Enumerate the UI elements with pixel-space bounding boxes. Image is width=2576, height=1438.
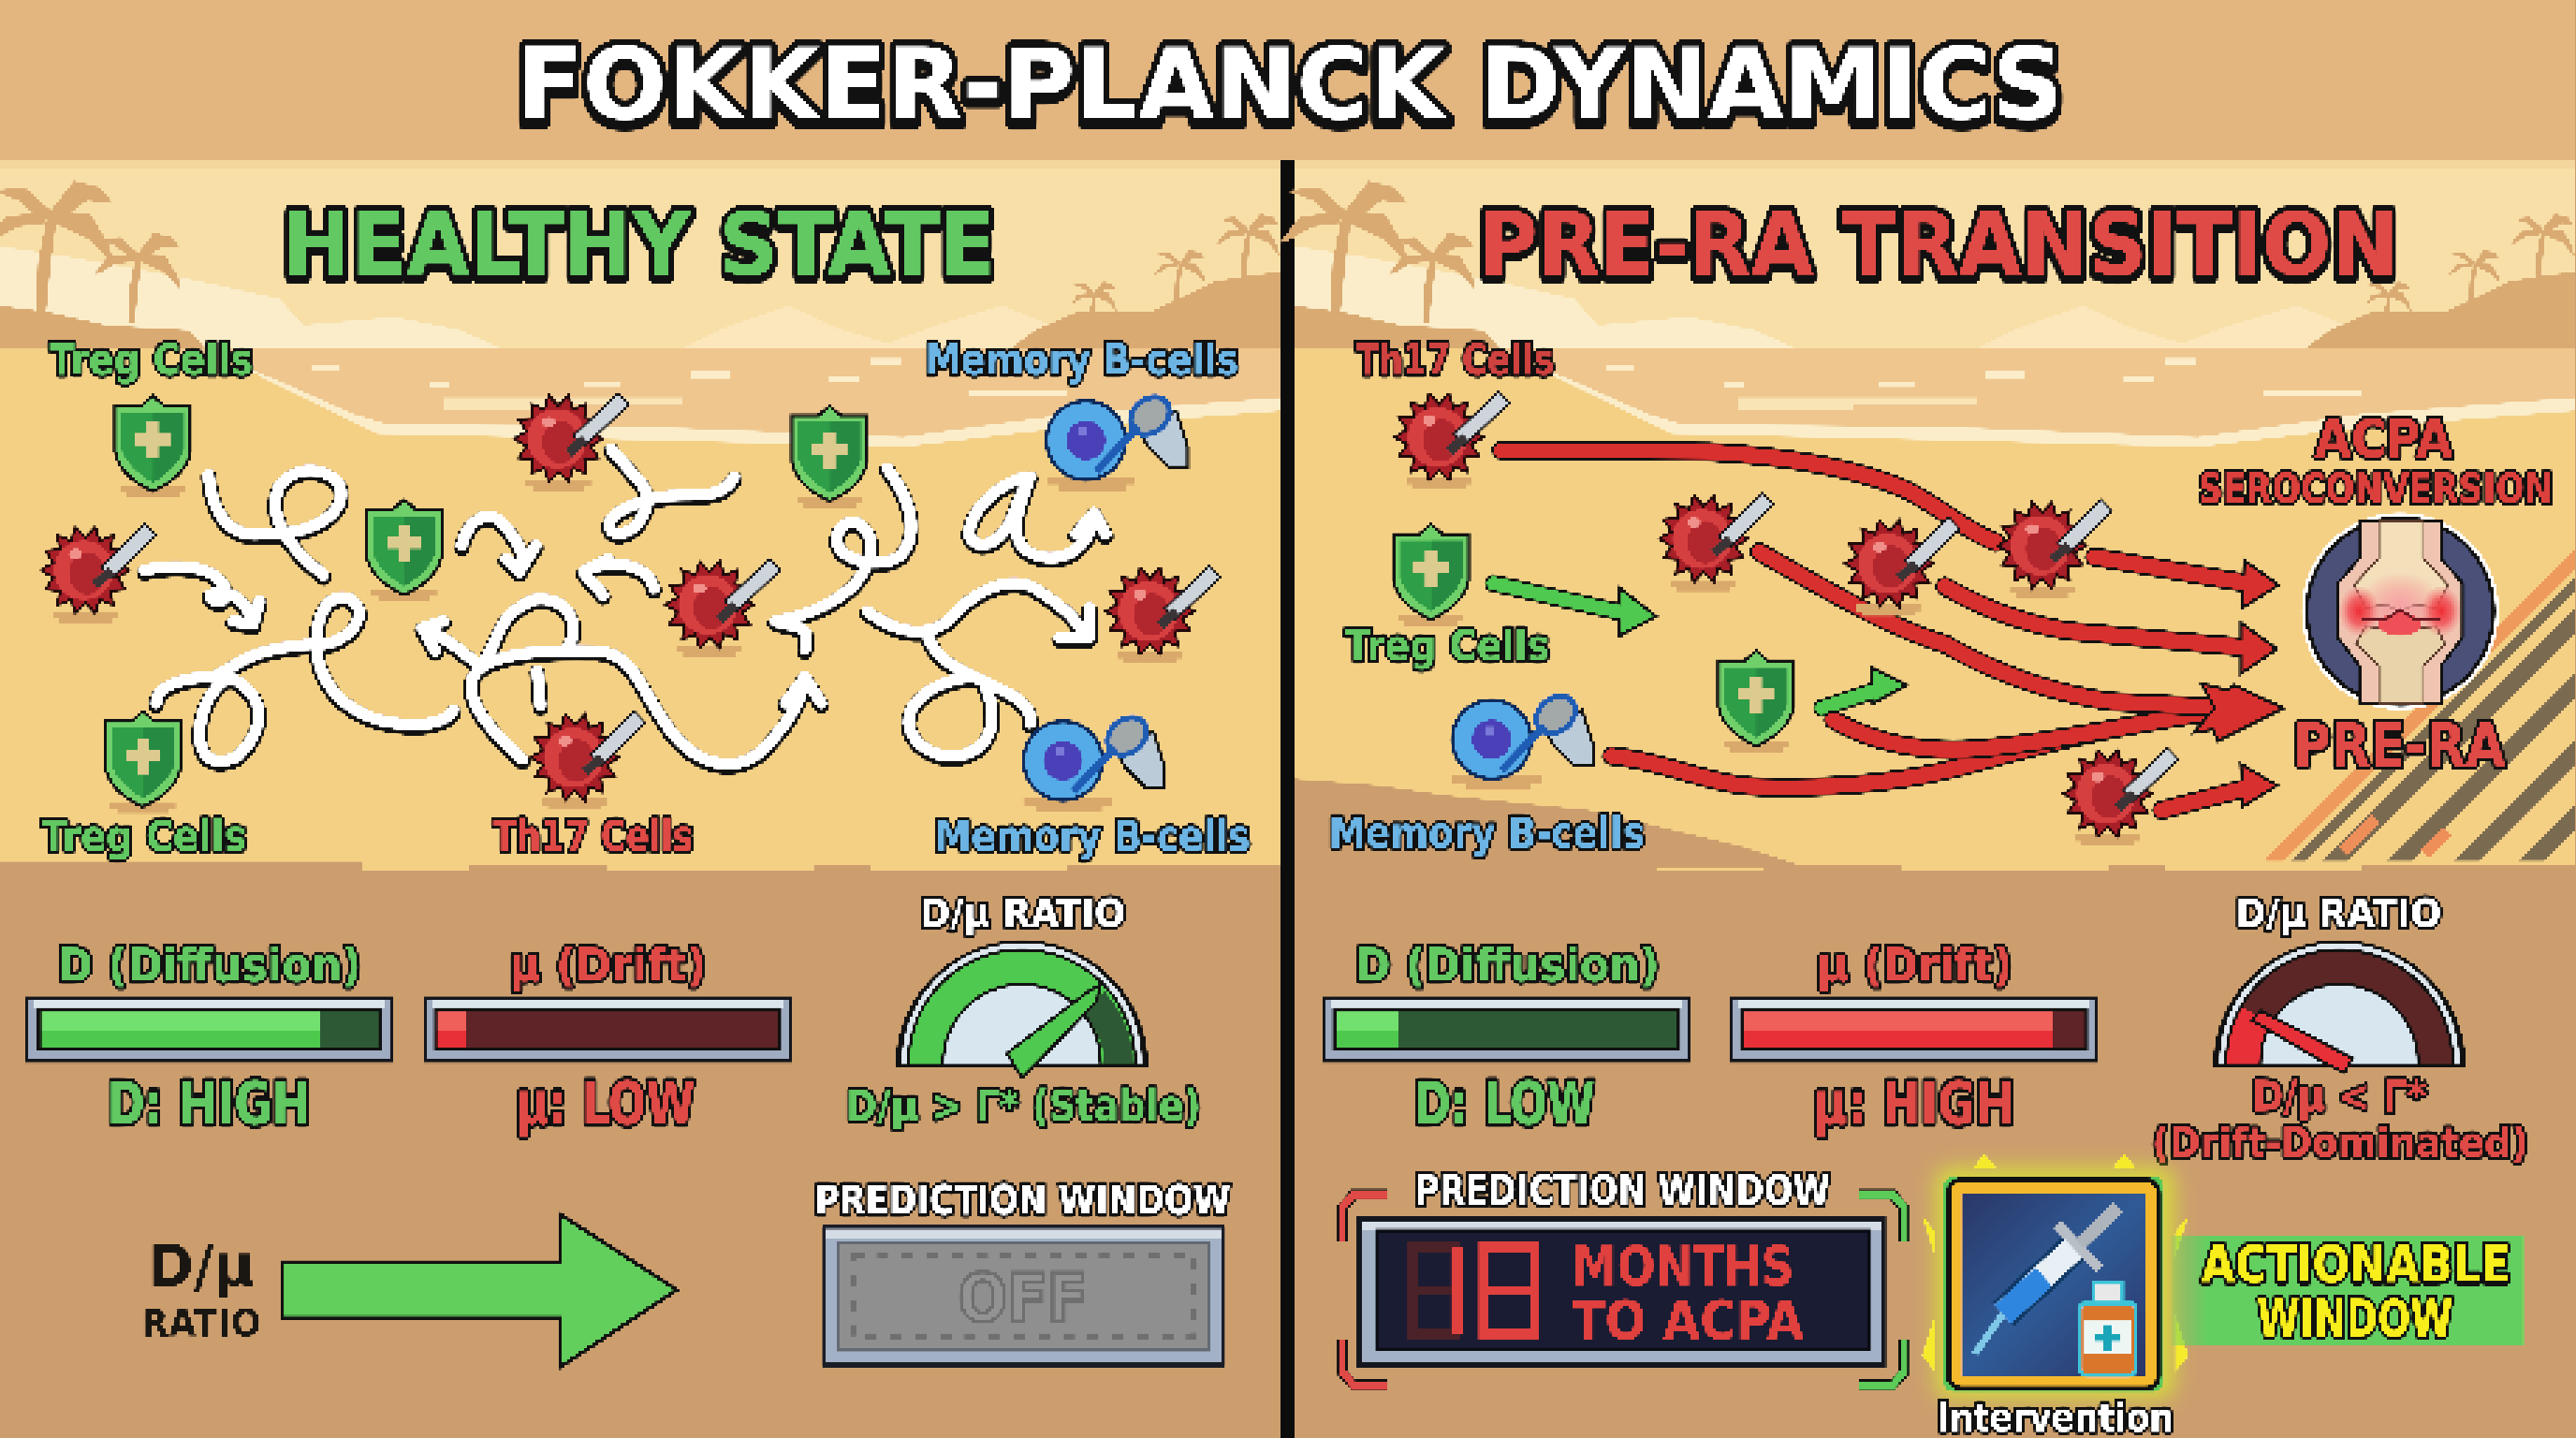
label: D/mu ratio: RATIO [141,1301,261,1345]
shore hill bottom left [1295,779,1808,871]
label: ratio gauge: D/μ RATIO [920,890,1125,936]
arrow: shield region to pre-RA [1834,708,2234,750]
label: prediction window off: PREDICTION WINDOW [815,1177,1231,1225]
arrow: green Treg small [1822,668,1908,708]
arrowhead: convergence to pre-RA [2193,683,2284,741]
arrow: second Th17 to joint [1945,587,2277,674]
arrow: B-cell to pre-RA [1612,708,2234,787]
icon: memory B-cell [1453,688,1593,790]
arrow: loop top left [209,470,342,578]
panel: countdown display [1357,1216,1886,1369]
label: memory B-cells bottom: Memory B-cells [935,812,1251,861]
arrow: lower Th17 to pre-RA [2162,764,2277,810]
icon: Th17 cell [1395,394,1505,490]
bar: mu low [424,996,792,1064]
icon: Th17 cell [1998,503,2108,598]
text: OFF: OFF [958,1260,1088,1337]
label: Treg cells top: Treg Cells [50,335,253,385]
gauge: drift dominated [2213,940,2466,1073]
icon: Treg shield [115,396,191,498]
verdict: drift dominated: (Drift-Dominated) [2152,1120,2528,1167]
text: window: WINDOW [2258,1289,2452,1348]
digits: 18 [1412,1247,1534,1334]
heading: pre-RA transition: PRE-RA TRANSITION [1479,194,2398,295]
label: memory B-cells: Memory B-cells [1329,809,1645,858]
value: mu high: μ: HIGH [1814,1068,2014,1137]
callout: actionable window [2172,1235,2524,1348]
verdict: drift dominated: D/μ < Γ* [2252,1071,2426,1121]
label: ACPA: ACPA [2315,409,2453,470]
text: actionable: ACTIONABLE [2202,1235,2510,1294]
arrow: from left Th17 [144,566,259,627]
icon: Th17 cell [1660,496,1769,592]
bar: D high [24,996,392,1064]
label: D diffusion: D (Diffusion) [1355,938,1660,992]
brackets: window corners [1342,1195,1904,1386]
icon: Th17 cell [2063,751,2174,846]
icon: Th17 cell [531,714,640,810]
label: memory B-cells top: Memory B-cells [925,335,1238,385]
icon: intervention syringe card [1922,1153,2188,1400]
title: FOKKER-PLANCK DYNAMICS [516,26,2063,141]
icon: Treg shield [1393,524,1469,626]
label: mu drift: μ (Drift) [1817,938,2012,992]
arrow: top right loop [970,477,1105,560]
text: to ACPA: TO ACPA [1573,1288,1804,1352]
bar: mu high [1730,996,2098,1064]
text: months: MONTHS [1573,1234,1794,1298]
arrow: short left-pointing [583,559,654,597]
icon: Th17 cell [666,562,775,657]
label: D/mu ratio [141,1231,261,1345]
arrow: Th17 drift long [1501,450,1996,542]
arrow: centre long wave [422,599,822,767]
arrow: right wave with loop [868,583,1090,758]
arrow: loop top centre [609,448,735,536]
panel: pre-RA transition [1280,161,2576,1438]
arrow: lower left loop [156,597,453,763]
arrow: large green right [283,1214,677,1367]
label: ratio gauge: D/μ RATIO [2236,890,2441,936]
label: Treg cells: Treg Cells [1345,622,1549,671]
arrow: green Treg up [1493,583,1656,636]
label: Th17 cells: Th17 Cells [493,812,694,861]
arrow: third Th17 to joint [2095,557,2278,608]
value: D low: D: LOW [1414,1068,1595,1137]
label: D diffusion: D (Diffusion) [57,938,361,992]
hatched danger zone [2267,539,2576,873]
label: Th17 cells: Th17 Cells [1355,335,1554,385]
arrow: long vertical squiggle [775,468,912,652]
verdict: drift dominated [2152,1071,2528,1167]
label: Treg cells bottom: Treg Cells [41,812,246,861]
label: prediction window: PREDICTION WINDOW [1414,1167,1830,1214]
verdict: stable: D/μ > Γ* (Stable) [846,1081,1201,1131]
panel: prediction window off [822,1225,1225,1369]
icon: memory B-cell [1046,389,1188,492]
icon: Treg shield [366,500,442,601]
icon: Th17 cell [41,527,151,623]
icon: Treg shield [105,712,181,814]
arrow: near centre shield [461,517,535,574]
panel: healthy state [0,161,1281,1369]
label: mu drift: μ (Drift) [509,938,707,992]
icon: memory B-cell [1023,710,1164,812]
icon: Th17 cell [1845,521,1955,616]
gauge: stable [896,940,1149,1078]
icon: Treg shield [792,406,868,507]
label: PRE-RA: PRE-RA [2293,711,2506,780]
heading: healthy state: HEALTHY STATE [283,194,996,295]
icon: inflamed knee joint [2302,513,2499,710]
value: D high: D: HIGH [107,1068,311,1137]
icon: Th17 cell [1105,568,1216,664]
icon: Treg shield [1719,651,1794,753]
label: D/mu ratio: D/μ [148,1231,255,1300]
header band [0,0,2576,161]
value: mu low: μ: LOW [516,1068,695,1137]
diffusion arrows: random walks [144,448,1105,767]
bar: D low [1323,996,1690,1064]
icon: Th17 cell [514,395,624,492]
arrow: Th17 centre to pre-RA [1760,552,2234,708]
center divider [1281,161,1295,1438]
